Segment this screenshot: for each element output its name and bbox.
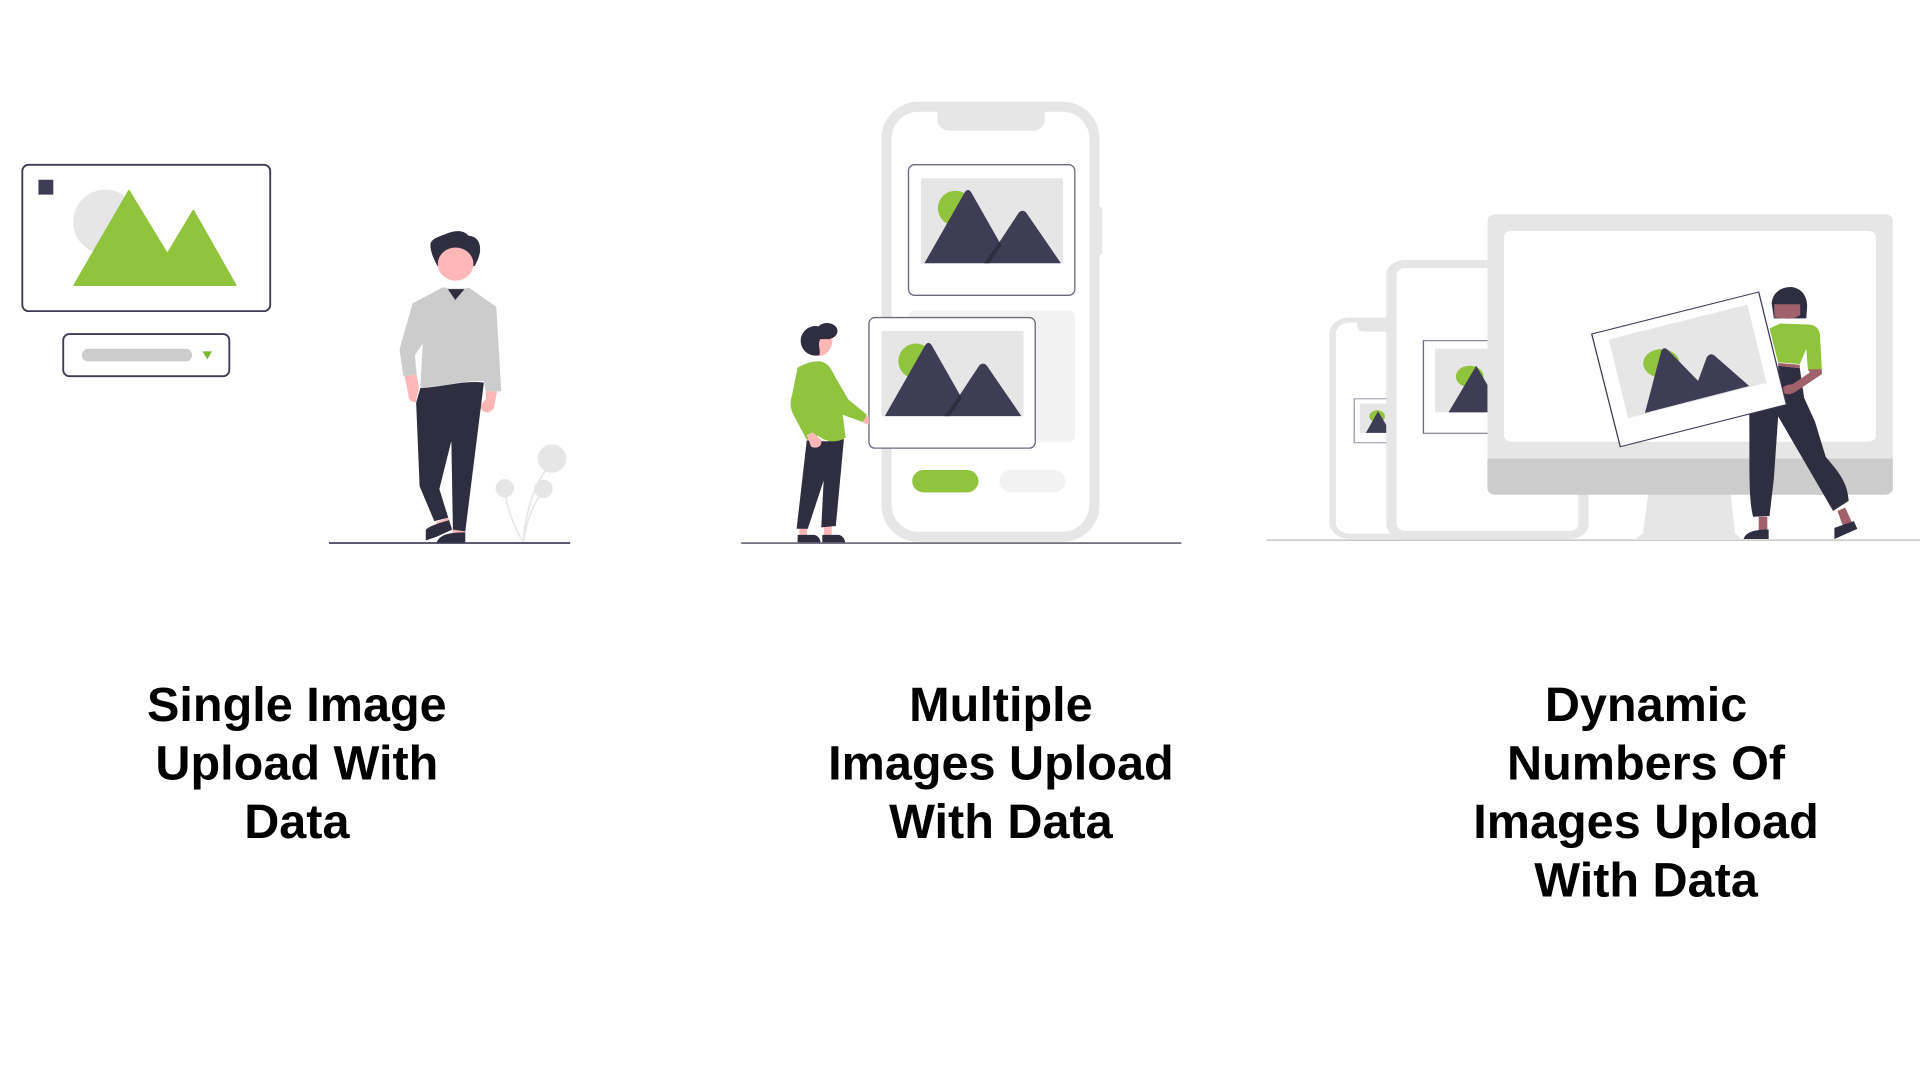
icon: tilted photo [1592, 292, 1786, 447]
panel: single image upload illustration [22, 165, 570, 544]
heading: multiple images upload: With Data [889, 795, 1114, 849]
heading: dynamic numbers of images upload: Numbers Of [1507, 736, 1786, 790]
heading: single image upload: Upload With [155, 736, 438, 790]
icon: tablet [1391, 264, 1583, 535]
heading: dynamic numbers of images upload: Dynamic [1545, 678, 1747, 732]
icon: image frame with green mountains [22, 165, 270, 311]
icon: small phone [1333, 320, 1419, 536]
heading: dynamic numbers of images upload [1473, 678, 1819, 907]
icon: image card held [869, 318, 1035, 448]
icon: desktop monitor [1487, 214, 1893, 540]
heading: multiple images upload: Images Upload [828, 736, 1174, 790]
figure: woman holding photo [1592, 287, 1857, 539]
panel: multiple images upload illustration [741, 107, 1181, 544]
figure: man in green sweater [791, 323, 869, 543]
heading: single image upload [147, 678, 447, 849]
icon: image card top [908, 165, 1075, 295]
heading: multiple images upload [828, 678, 1174, 849]
heading: dynamic numbers of images upload: With Data [1534, 853, 1759, 907]
heading: single image upload: Single Image [147, 678, 447, 732]
figure: standing man with plant [329, 231, 570, 544]
heading: multiple images upload: Multiple [909, 678, 1093, 732]
icon: dropdown control [63, 334, 229, 376]
heading: single image upload: Data [244, 795, 350, 849]
panel: dynamic numbers of images illustration [1266, 214, 1920, 541]
heading: dynamic numbers of images upload: Images Upload [1473, 795, 1819, 849]
icon: phone outline [887, 107, 1102, 537]
